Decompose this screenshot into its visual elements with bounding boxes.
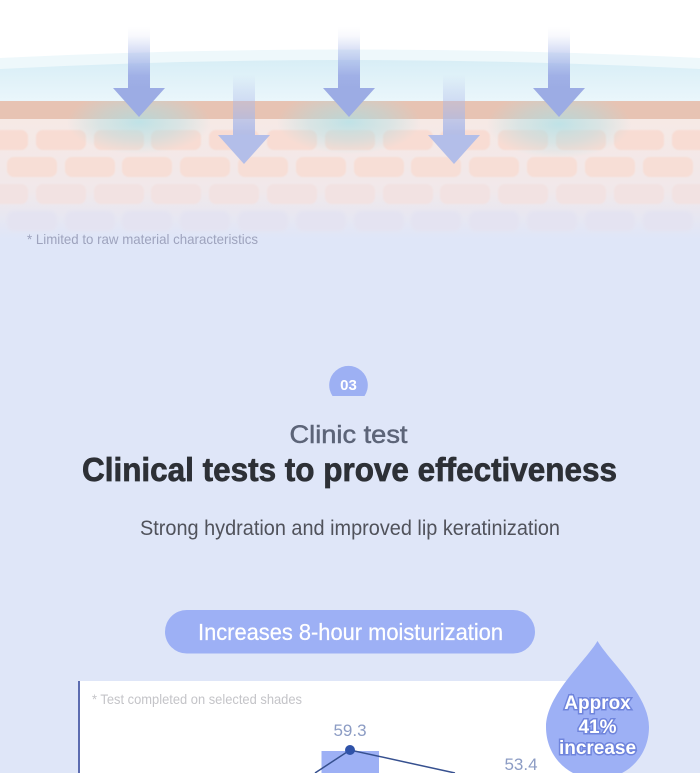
main heading: Clinical tests to prove effectiveness bbox=[82, 451, 617, 488]
moisture film layer bbox=[0, 50, 700, 101]
chart note: * Test completed on selected shades bbox=[92, 691, 302, 707]
arrow 3 bbox=[323, 27, 375, 117]
callout text bbox=[559, 693, 636, 759]
section label: Clinic test bbox=[290, 421, 408, 449]
skin diagram bbox=[0, 0, 700, 239]
arrow 2 bbox=[218, 75, 270, 164]
arrow 1 bbox=[113, 27, 165, 117]
skin surface band bbox=[0, 101, 700, 119]
callout text: 41% bbox=[578, 717, 617, 738]
hydration glows under arrows bbox=[76, 101, 622, 154]
section number badge: 03 bbox=[340, 377, 357, 394]
benefit pill bbox=[165, 610, 535, 654]
section number badge bbox=[329, 366, 368, 396]
chart panel bbox=[78, 681, 621, 773]
bar bbox=[322, 751, 379, 773]
benefit pill: Increases 8-hour moisturization bbox=[198, 619, 503, 645]
skin tissue base bbox=[0, 119, 700, 239]
arrow 4 bbox=[428, 75, 480, 164]
trend line bbox=[315, 750, 455, 773]
water drop callout bbox=[546, 641, 649, 773]
arrow 5 bbox=[533, 27, 585, 117]
skin cell bricks bbox=[0, 130, 700, 231]
panel background bbox=[79, 681, 621, 773]
subheading: Strong hydration and improved lip keratinization bbox=[140, 517, 560, 540]
data point bbox=[345, 745, 355, 755]
footnote: * Limited to raw material characteristics bbox=[27, 231, 258, 247]
callout text: increase bbox=[559, 738, 636, 759]
callout text: Approx bbox=[564, 693, 631, 714]
white sky above the skin bbox=[0, 0, 700, 100]
y axis bbox=[78, 681, 80, 773]
value label 59.3: 59.3 bbox=[333, 721, 367, 740]
